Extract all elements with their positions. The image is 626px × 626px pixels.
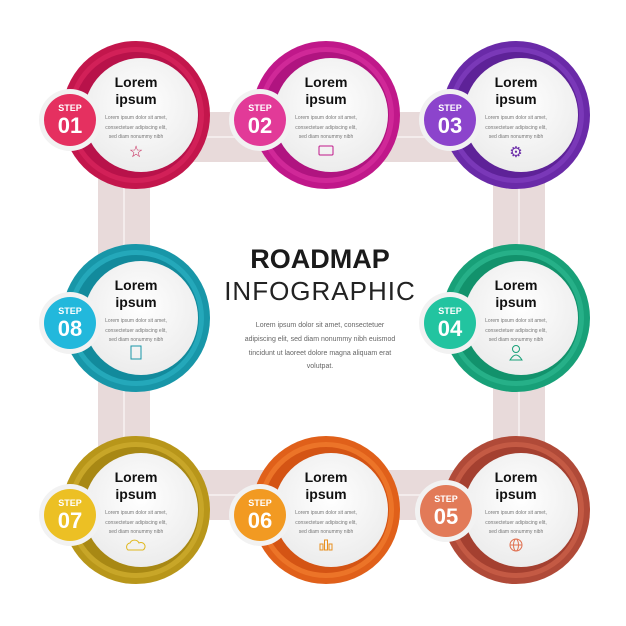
description text	[245, 322, 395, 370]
step 05: consectetuer adipiscing elit,	[485, 520, 547, 526]
step 07: 07	[58, 508, 82, 533]
step 01: STEP	[58, 103, 82, 113]
step 08: Lorem ipsum dolor sit amet,	[105, 318, 167, 324]
step 01: ☆	[129, 144, 143, 161]
description text: adipiscing elit, sed diam nonummy nibh euismod	[245, 336, 395, 343]
step 03: STEP	[438, 103, 462, 113]
step 01: ipsum	[115, 91, 157, 107]
step 02	[229, 41, 400, 189]
step 06: ipsum	[305, 486, 347, 502]
step 04	[419, 244, 590, 392]
step 02: sed diam nonummy nibh	[299, 134, 353, 140]
step 05: ipsum	[495, 486, 537, 502]
description text: volutpat.	[307, 363, 333, 370]
step 04: sed diam nonummy nibh	[489, 337, 543, 343]
step 05: 05	[434, 504, 458, 529]
step 08: consectetuer adipiscing elit,	[105, 328, 167, 334]
step 03: ⚙	[509, 144, 523, 161]
step 08: sed diam nonummy nibh	[109, 337, 163, 343]
step 08: STEP	[58, 306, 82, 316]
step 03: 03	[438, 113, 462, 138]
step 01: Lorem	[115, 74, 157, 90]
step 02: Lorem ipsum dolor sit amet,	[295, 115, 357, 121]
step 03: Lorem	[495, 74, 537, 90]
step 02: consectetuer adipiscing elit,	[295, 125, 357, 131]
step 07: ipsum	[115, 486, 157, 502]
step 02: ipsum	[305, 91, 347, 107]
step 02: 02	[248, 113, 272, 138]
step 06: consectetuer adipiscing elit,	[295, 520, 357, 526]
step 08: ipsum	[115, 294, 157, 310]
step 04: consectetuer adipiscing elit,	[485, 328, 547, 334]
step 07: Lorem ipsum dolor sit amet,	[105, 510, 167, 516]
step 05: STEP	[434, 494, 458, 504]
step 04: STEP	[438, 306, 462, 316]
step 01: 01	[58, 113, 82, 138]
step 04: Lorem	[495, 277, 537, 293]
step 07	[39, 436, 210, 584]
step 03: sed diam nonummy nibh	[489, 134, 543, 140]
step 01: sed diam nonummy nibh	[109, 134, 163, 140]
step 07: sed diam nonummy nibh	[109, 529, 163, 535]
step 08: 08	[58, 316, 82, 341]
road path	[98, 112, 545, 520]
step 06	[229, 436, 400, 584]
step 01	[39, 41, 210, 189]
step 05: Lorem	[495, 469, 537, 485]
step 02: Lorem	[305, 74, 347, 90]
step 06: Lorem	[305, 469, 347, 485]
step 08	[39, 244, 210, 392]
description text: tincidunt ut laoreet dolore magna aliquam erat	[249, 350, 391, 357]
step 07: STEP	[58, 498, 82, 508]
step 01: Lorem ipsum dolor sit amet,	[105, 115, 167, 121]
step 04: ipsum	[495, 294, 537, 310]
title: INFOGRAPHIC	[224, 276, 416, 306]
step 08: Lorem	[115, 277, 157, 293]
step 03: consectetuer adipiscing elit,	[485, 125, 547, 131]
step 05	[415, 436, 590, 584]
step 04: Lorem ipsum dolor sit amet,	[485, 318, 547, 324]
title	[224, 244, 416, 306]
step 05: Lorem ipsum dolor sit amet,	[485, 510, 547, 516]
step 06: STEP	[248, 498, 272, 508]
description text: Lorem ipsum dolor sit amet, consectetuer	[256, 322, 385, 329]
step 03: Lorem ipsum dolor sit amet,	[485, 115, 547, 121]
step 02: STEP	[248, 103, 272, 113]
step 07: Lorem	[115, 469, 157, 485]
title: ROADMAP	[250, 244, 390, 274]
step 04: 04	[438, 316, 463, 341]
step 07: consectetuer adipiscing elit,	[105, 520, 167, 526]
step 01: consectetuer adipiscing elit,	[105, 125, 167, 131]
step 03: ipsum	[495, 91, 537, 107]
step 05: sed diam nonummy nibh	[489, 529, 543, 535]
step 06: 06	[248, 508, 272, 533]
step 06: sed diam nonummy nibh	[299, 529, 353, 535]
step 06: Lorem ipsum dolor sit amet,	[295, 510, 357, 516]
step 03	[419, 41, 590, 189]
